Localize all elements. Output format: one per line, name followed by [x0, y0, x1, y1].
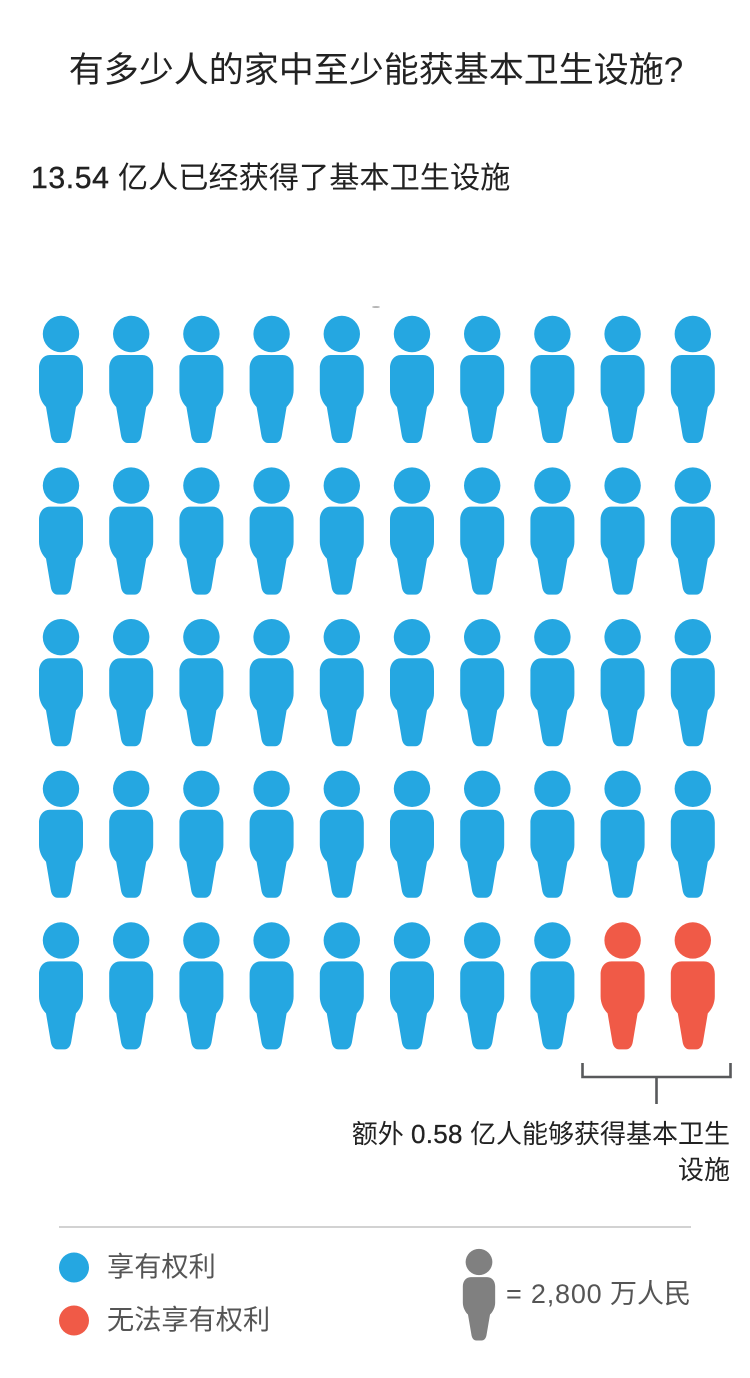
subtitle: people with access: 13.54 亿人已经获得了基本卫生设施 [31, 162, 510, 195]
legend label: no rights: 无法享有权利 [107, 1304, 270, 1335]
title: 有多少人的家中至少能获基本卫生设施? [69, 51, 683, 90]
icon: grey person scale [463, 1249, 495, 1340]
bracket [582, 1063, 730, 1104]
speck [372, 306, 380, 308]
callout text [352, 1119, 730, 1185]
row 2 [39, 467, 715, 595]
callout text: 额外 0.58 亿人能够获得基本卫生 [352, 1119, 730, 1149]
legend dot: has rights [59, 1252, 89, 1282]
legend dot: no rights [59, 1306, 89, 1336]
row 3 [39, 619, 715, 746]
scale label: = 2,800 万人民 [506, 1279, 691, 1309]
row 1 [39, 316, 715, 443]
row 5: red figures [601, 922, 715, 1049]
row 4 [39, 771, 715, 898]
legend label: has rights: 享有权利 [107, 1251, 216, 1282]
callout text: 设施 [678, 1155, 730, 1185]
legend divider [59, 1226, 691, 1228]
row 5: blue figures [39, 922, 574, 1049]
